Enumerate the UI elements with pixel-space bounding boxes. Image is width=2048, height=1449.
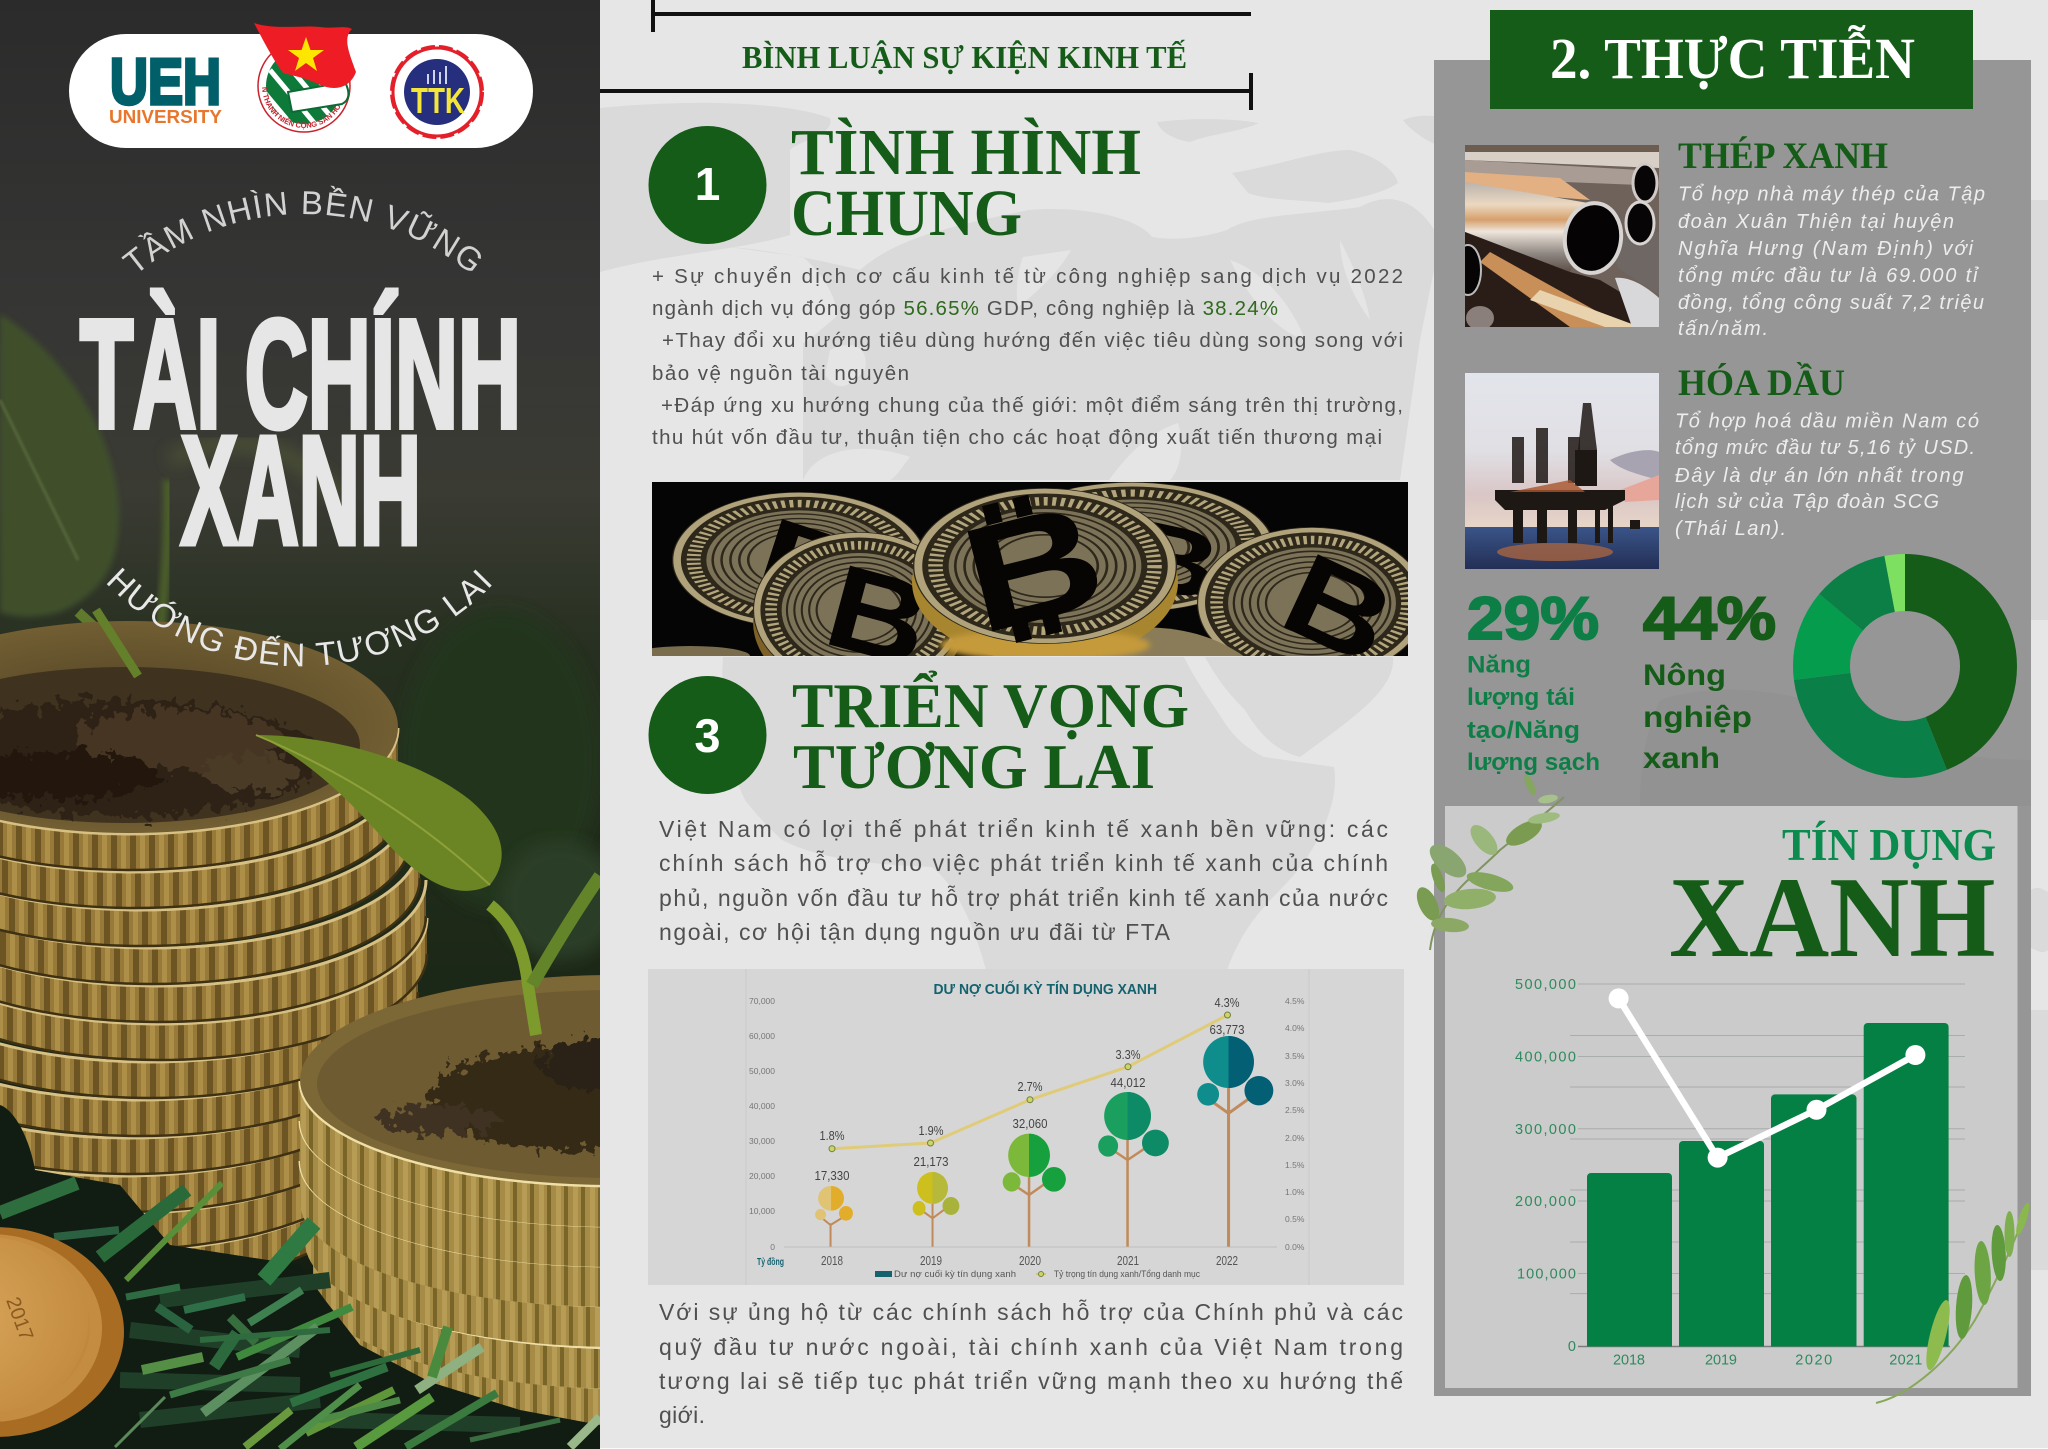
body text: ngoài, cơ hội tận dụng nguồn ưu đãi từ FTA [659, 919, 1171, 945]
decoration: leaf branch bottom [1876, 1202, 2032, 1403]
percent and value labels: 1.9% [918, 1123, 944, 1138]
left axis labels: 40,000 [749, 1101, 775, 1111]
body text: chính sách hỗ trợ cho việc phát triển kinh tế xanh của chính [659, 850, 1388, 876]
left axis labels: 30,000 [749, 1136, 775, 1146]
left axis labels: 0 [770, 1242, 775, 1252]
right axis labels: 0.5% [1285, 1214, 1305, 1224]
world map watermark [600, 103, 2048, 1270]
heading: TRIỂN VỌNG [792, 670, 1189, 741]
left axis labels: 20,000 [749, 1171, 775, 1181]
chart legend: Tỷ trọng tín dụng xanh/Tổng danh mục [1054, 1269, 1200, 1280]
stat: 44 percent green agriculture: nghiệp [1643, 701, 1752, 734]
percent and value labels: 21,173 [914, 1154, 948, 1169]
x axis years: 2021 [1117, 1254, 1139, 1268]
body text: thu hút vốn đầu tư, thuận tiện cho các hoạt động xuất tiến thương mại [652, 426, 1382, 449]
panel: green credit [1445, 806, 2018, 1388]
right axis labels: 3.5% [1285, 1051, 1305, 1061]
title: XANH [181, 404, 421, 576]
closing paragraph: tương lai sẽ tiếp tục phát triển vững mạnh theo xu hướng thế [659, 1368, 1403, 1394]
title [80, 288, 521, 576]
right axis labels [1285, 996, 1305, 1252]
heading: CHUNG [791, 177, 1022, 250]
number badge 3: 3 [694, 709, 721, 762]
title: TÀI CHÍNH [80, 288, 521, 460]
percent and value labels: 1.8% [820, 1128, 845, 1143]
x axis labels: 2020 [1795, 1352, 1832, 1368]
photo: grass [0, 1105, 600, 1449]
photo: copper coin: 2017 [1, 1294, 37, 1344]
text: green steel: tổng mức đầu tư là 69.000 tỉ [1678, 265, 1979, 287]
body text: + Sự chuyển dịch cơ cấu kinh tế từ công nghiệp sang dịch vụ 2022 [652, 265, 1403, 288]
right axis labels: 2.0% [1285, 1133, 1305, 1143]
header banner: 2. THỰC TIỄN [1550, 26, 1915, 91]
photo: bitcoins: B [1114, 498, 1229, 622]
closing paragraph: Với sự ủng hộ từ các chính sách hỗ trợ của Chính phủ và các [659, 1299, 1403, 1325]
body text: bảo vệ nguồn tài nguyên [652, 362, 909, 385]
curved tagline bottom: HƯỚNG ĐẾN TƯƠNG LAI [106, 568, 492, 666]
y axis labels [1515, 977, 1576, 1355]
text: petrochemicals: Tổ hợp hoá dầu miền Nam có [1675, 410, 1979, 432]
x axis labels [1613, 1352, 1922, 1368]
logo: UEH University: UNIVERSITY [109, 107, 222, 127]
bitcoin symbol [968, 494, 1098, 643]
photo: oil rig [1465, 373, 1659, 569]
text: green steel: Tổ hợp nhà máy thép của Tập [1678, 184, 1985, 206]
heading: TÌNH HÌNH [791, 116, 1141, 189]
closing paragraph: giới. [659, 1402, 705, 1428]
photo: bitcoins [652, 482, 1408, 656]
body text [652, 265, 1403, 449]
curved tagline top: TẦM NHÌN BỀN VỮNG [122, 186, 481, 271]
right axis labels: 3.0% [1285, 1078, 1305, 1088]
number badge 1: 1 [695, 158, 720, 210]
stat: 29 percent renewable energy: Năng [1467, 652, 1531, 678]
section 1: general situation [648, 116, 1403, 449]
heading [792, 670, 1189, 802]
photo: bitcoins: B [744, 495, 878, 637]
percent and value labels [814, 995, 1244, 1183]
tree icons [815, 1036, 1273, 1247]
body text: +Đáp ứng xu hướng chung của thế giới: một điểm sáng trên thị trường, [661, 394, 1403, 417]
closing paragraph: quỹ đầu tư nước ngoài, tài chính xanh của Việt Nam trong [659, 1334, 1403, 1360]
percent and value labels: 63,773 [1210, 1022, 1244, 1037]
right axis labels: 4.5% [1285, 996, 1305, 1006]
x axis years: 2020 [1019, 1254, 1041, 1268]
stat: 29 percent renewable energy: lượng tái [1467, 684, 1575, 711]
section heading: economic commentary: BÌNH LUẬN SỰ KIỆN KINH TẾ [742, 39, 1187, 75]
x axis labels: 2019 [1705, 1352, 1737, 1368]
text: petrochemicals: Đây là dự án lớn nhất trong [1675, 465, 1964, 487]
percent and value labels: 17,330 [814, 1168, 850, 1183]
logo: UEH University: UEH [110, 45, 221, 118]
photo: bitcoins: B [1265, 527, 1413, 690]
right axis labels: 4.0% [1285, 1023, 1305, 1033]
photo: bitcoins: B [813, 539, 943, 693]
stat: 44 percent green agriculture: Nông [1643, 659, 1726, 692]
heading: XANH [1669, 854, 1996, 982]
x axis years: 2018 [821, 1254, 843, 1268]
x axis years: 2019 [920, 1254, 942, 1268]
photo: sprout leaf [256, 735, 600, 1035]
stat: 44 percent green agriculture: xanh [1643, 742, 1720, 775]
decoration: leaf branch top [1412, 773, 1564, 950]
body text [659, 816, 1388, 945]
text: green steel [1678, 135, 1985, 340]
text: green steel: Nghĩa Hưng (Nam Định) với [1678, 238, 1974, 260]
chart: green credit balance: Tỷ đồng [757, 1256, 784, 1268]
text: petrochemicals [1675, 361, 1979, 540]
percent and value labels: 4.3% [1214, 995, 1240, 1010]
stat: 44 percent green agriculture [1643, 585, 1776, 775]
heading: TƯƠNG LAI [793, 731, 1155, 802]
photo background foliage [0, 314, 620, 960]
logo bar [69, 23, 533, 148]
right axis labels: 0.0% [1285, 1242, 1305, 1252]
y axis labels: 200,000 [1515, 1194, 1576, 1210]
percent and value labels: 32,060 [1012, 1116, 1048, 1131]
text: green steel: THÉP XANH [1678, 135, 1888, 177]
x axis years [821, 1254, 1238, 1268]
y axis labels: 400,000 [1515, 1050, 1576, 1066]
text: petrochemicals: tổng mức đầu tư 5,16 tỷ USD. [1675, 437, 1975, 459]
donut chart [1822, 582, 1988, 750]
y axis labels: 500,000 [1515, 977, 1576, 993]
text: petrochemicals: (Thái Lan). [1675, 518, 1786, 540]
text: green steel: tấn/năm. [1678, 318, 1768, 340]
left axis labels: 60,000 [749, 1031, 775, 1041]
y axis labels: 300,000 [1515, 1122, 1576, 1138]
percent and value labels: 2.7% [1018, 1079, 1043, 1094]
panel: cover photo [0, 0, 600, 1449]
right axis labels: 1.0% [1285, 1187, 1305, 1197]
text: green steel: đồng, tổng công suất 7,2 triệu [1678, 292, 1984, 314]
right axis labels: 2.5% [1285, 1105, 1305, 1115]
number badge 3 [648, 676, 766, 794]
left axis labels: 10,000 [749, 1206, 775, 1216]
chart title: DƯ NỢ CUỐI KỲ TÍN DỤNG XANH [934, 980, 1157, 998]
section 3: outlook [648, 670, 1388, 945]
body text: ngành dịch vụ đóng góp 56.65% GDP, công nghiệp là 38.24% [652, 297, 1278, 320]
left axis labels [749, 996, 775, 1252]
logo: TTK faculty seal: TTK [411, 80, 465, 121]
number badge 1 [648, 126, 766, 244]
left axis labels: 70,000 [749, 996, 775, 1006]
photo: copper coin [0, 1227, 124, 1437]
photo: sprout on large stack [96, 610, 138, 676]
stat: 44 percent green agriculture: 44% [1643, 585, 1776, 652]
text: petrochemicals: HÓA DẦU [1678, 361, 1845, 404]
share line [829, 1012, 1230, 1152]
logo: TTK faculty seal [392, 46, 482, 138]
chart legend: Dư nợ cuối kỳ tín dụng xanh [894, 1269, 1016, 1280]
left axis labels: 50,000 [749, 1066, 775, 1076]
body text: phủ, nguồn vốn đầu tư hỗ trợ phát triển kinh tế xanh của nước [659, 885, 1388, 911]
bitcoin symbol: B [947, 470, 1119, 665]
heading: TÍN DỤNG [1782, 819, 1996, 870]
bars [1587, 1023, 1949, 1346]
section heading: economic commentary [600, 0, 1251, 110]
bar and line chart [1515, 977, 1965, 1368]
stat: 29 percent renewable energy: lượng sạch [1467, 749, 1600, 776]
logo: youth union [254, 23, 356, 133]
percent and value labels: 3.3% [1116, 1047, 1141, 1062]
x axis years: 2022 [1216, 1254, 1238, 1268]
header banner [1490, 10, 1973, 109]
line series [1609, 988, 1925, 1168]
x axis labels: 2018 [1613, 1352, 1645, 1368]
stat: 29 percent renewable energy: tạo/Năng [1467, 717, 1580, 744]
photo: large coin stack [0, 621, 427, 1288]
text: petrochemicals: lịch sử của Tập đoàn SCG [1675, 491, 1939, 513]
text: green steel: đoàn Xuân Thiện tại huyện [1678, 211, 1954, 233]
body text: +Thay đổi xu hướng tiêu dùng hướng đến việc tiêu dùng song song với [662, 329, 1403, 352]
photo: steel pipes [1455, 145, 1659, 330]
panel: practice [1434, 10, 2031, 1396]
x axis labels: 2021 [1889, 1352, 1922, 1368]
y axis labels: 100,000 [1517, 1266, 1576, 1282]
body text: Việt Nam có lợi thế phát triển kinh tế xanh bền vững: các [659, 816, 1388, 842]
right axis labels: 1.5% [1285, 1160, 1305, 1170]
y axis labels: 0 [1568, 1339, 1576, 1355]
photo: small coin stack [298, 975, 600, 1425]
chart legend [875, 1269, 1200, 1280]
stat: 29 percent renewable energy: 29% [1467, 585, 1599, 652]
stat: 29 percent renewable energy [1467, 585, 1600, 776]
heading [791, 116, 1141, 250]
percent and value labels: 44,012 [1110, 1075, 1146, 1090]
closing paragraph [659, 1299, 1403, 1428]
chart: green credit balance [648, 969, 1404, 1285]
